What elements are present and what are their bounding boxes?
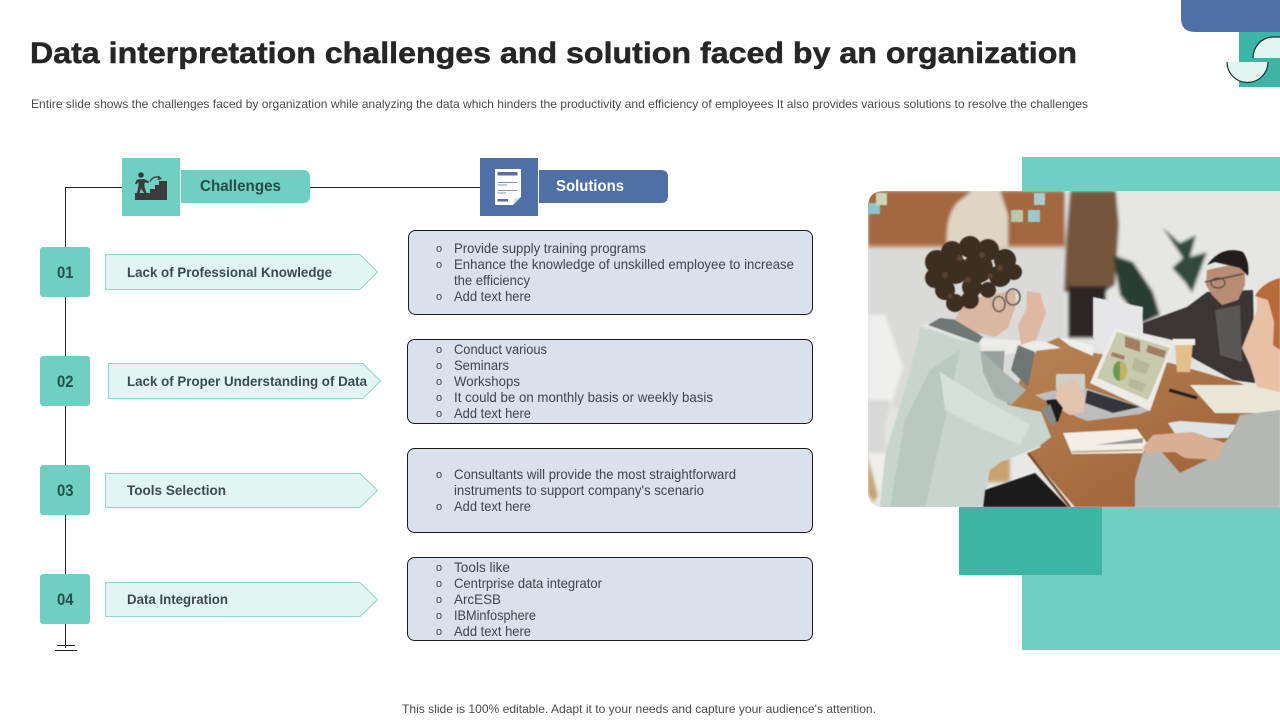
solution box 1: o bbox=[436, 291, 442, 303]
watch and cuff bbox=[1046, 399, 1063, 422]
solution box 4: ArcESB bbox=[454, 591, 501, 607]
solution box 4: o bbox=[436, 562, 442, 574]
solution box 4: o bbox=[436, 578, 442, 590]
solution box 2: Conduct various bbox=[454, 341, 547, 357]
challenge: Data Integration bbox=[106, 582, 378, 616]
corner decoration bbox=[1181, 0, 1280, 87]
notebook right bbox=[1190, 385, 1280, 413]
pants bbox=[983, 473, 1068, 507]
paper cup bbox=[1175, 342, 1193, 372]
papers behind mug bbox=[981, 338, 1061, 355]
challenge: Tools Selection bbox=[106, 474, 378, 508]
solution box 4: o bbox=[436, 594, 442, 606]
glasses bbox=[1006, 289, 1020, 305]
mug bbox=[982, 350, 1006, 372]
solution box 2: o bbox=[436, 344, 442, 356]
solution box 4 bbox=[408, 558, 812, 640]
foreground man head bbox=[1242, 285, 1280, 392]
laptop on table bbox=[1035, 385, 1150, 421]
title: Data interpretation challenges and solution faced by an organization bbox=[30, 37, 1077, 70]
solution box 4: IBMinfosphere bbox=[454, 607, 536, 623]
solution box 3 bbox=[408, 448, 812, 532]
solution box 2: o bbox=[436, 392, 442, 404]
foreground man hands bbox=[1143, 432, 1225, 460]
icon: person climbing stairs bbox=[122, 158, 180, 216]
solution box 2: o bbox=[436, 360, 442, 372]
table bbox=[1005, 337, 1280, 507]
solution box 2: It could be on monthly basis or weekly basis bbox=[454, 389, 713, 405]
challenge: Lack of Proper Understanding of Data: Lack of Proper Understanding of Data bbox=[127, 373, 367, 389]
row 1 bbox=[40, 230, 812, 314]
document on table bbox=[1168, 421, 1237, 438]
solution box 4: Tools like bbox=[454, 559, 510, 575]
solution box 3: Consultants will provide the most straightforward bbox=[454, 466, 736, 482]
challenges header bbox=[122, 158, 310, 216]
solution box 3: Add text here bbox=[454, 498, 531, 514]
subtitle: Entire slide shows the challenges faced by organization while analyzing the data which hinders the productivity and efficiency of employees It also provides various solutions to resolve the challenges bbox=[31, 97, 1088, 111]
number 03 bbox=[40, 465, 90, 515]
number 01 bbox=[40, 247, 90, 297]
challenges label: Challenges bbox=[200, 178, 281, 195]
solution box 1: o bbox=[436, 243, 442, 255]
solution box 4: o bbox=[436, 626, 442, 638]
challenge: Lack of Professional Knowledge: Lack of Professional Knowledge bbox=[127, 264, 332, 280]
solution box 1 bbox=[408, 230, 812, 314]
timeline connector bbox=[55, 188, 480, 650]
solution box 1: o bbox=[436, 259, 442, 271]
challenge: Lack of Proper Understanding of Data bbox=[108, 364, 380, 398]
grey collar bbox=[928, 318, 983, 343]
solution box 2: o bbox=[436, 376, 442, 388]
inner sleeve bbox=[980, 350, 1026, 405]
footer note: This slide is 100% editable. Adapt it to your needs and capture your audience's attention. bbox=[402, 702, 876, 716]
number 04: 04 bbox=[57, 591, 74, 609]
solution box 4: Centrprise data integrator bbox=[454, 575, 602, 591]
solutions header bbox=[480, 158, 668, 216]
number 04 bbox=[40, 574, 90, 624]
solution box 4: o bbox=[436, 610, 442, 622]
hand bbox=[1053, 378, 1085, 415]
small notebook bbox=[1063, 429, 1147, 454]
solution box 2: Workshops bbox=[454, 373, 520, 389]
mug in hand bbox=[1056, 374, 1085, 390]
foreground man jacket bbox=[1135, 410, 1280, 507]
solution box 2: o bbox=[436, 408, 442, 420]
sleeve behind bbox=[1011, 345, 1035, 387]
solution box 1: Enhance the knowledge of unskilled employee to increase bbox=[454, 256, 794, 272]
number 01: 01 bbox=[57, 264, 74, 282]
icon: document bbox=[480, 158, 538, 216]
challenge: Lack of Professional Knowledge bbox=[106, 254, 378, 290]
woman jacket bbox=[880, 327, 1051, 507]
challenges label bbox=[181, 170, 310, 203]
challenge: Data Integration: Data Integration bbox=[127, 591, 228, 607]
solution box 2 bbox=[408, 340, 812, 424]
number 03: 03 bbox=[57, 482, 74, 500]
row 2 bbox=[40, 340, 812, 424]
solution box 3: instruments to support company's scenario bbox=[454, 482, 704, 498]
solution box 1: the efficiency bbox=[454, 272, 530, 288]
white laptop back bbox=[1092, 296, 1144, 340]
solution box 3: o bbox=[436, 469, 442, 481]
solution box 4: Add text here bbox=[454, 623, 531, 639]
chair and floor at left bbox=[868, 315, 903, 405]
solution box 1: Provide supply training programs bbox=[454, 240, 646, 256]
solution box 2: Seminars bbox=[454, 357, 509, 373]
face bbox=[955, 290, 1016, 337]
solution box 3: o bbox=[436, 501, 442, 513]
number 02 bbox=[40, 356, 90, 406]
man at back bbox=[1143, 290, 1255, 383]
challenge: Tools Selection: Tools Selection bbox=[127, 482, 226, 498]
photo: team meeting around a table bbox=[868, 191, 1280, 507]
dark teal accent block bbox=[959, 507, 1102, 575]
plant bbox=[1162, 227, 1207, 293]
teal backdrop panel bbox=[1022, 157, 1280, 650]
solutions label: Solutions bbox=[556, 178, 624, 195]
solution box 2: Add text here bbox=[454, 405, 531, 421]
hair curls bbox=[925, 236, 1022, 312]
raised hand bbox=[1018, 291, 1046, 345]
solution box 1: Add text here bbox=[454, 288, 531, 304]
row 3 bbox=[40, 448, 812, 532]
number 02: 02 bbox=[57, 373, 74, 391]
solutions label bbox=[539, 170, 668, 203]
sticky notes bbox=[868, 203, 880, 214]
row 4 bbox=[40, 558, 812, 640]
